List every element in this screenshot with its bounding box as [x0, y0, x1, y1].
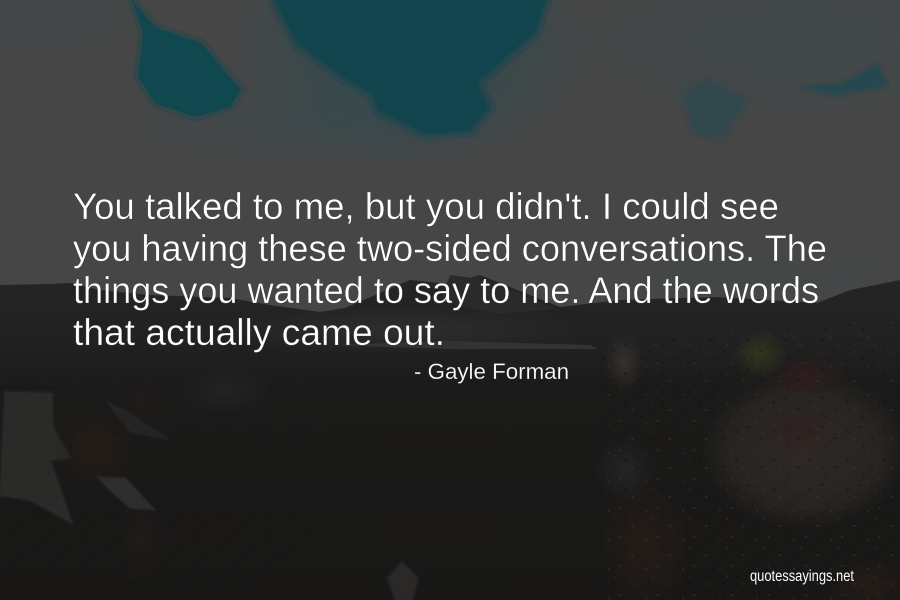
- quote text: you having these two-sided conversations. The: [73, 228, 827, 269]
- quote text: things you wanted to say to me. And the words: [73, 270, 819, 311]
- watermark: quotessayings.net: [750, 568, 855, 585]
- author attribution: - Gayle Forman: [414, 359, 569, 384]
- background: mountain ridge and mid-ground: [0, 275, 900, 600]
- background: teal sky patches: [132, 0, 886, 165]
- quote text: that actually came out.: [73, 312, 445, 353]
- background: right rock faces: [0, 315, 900, 600]
- quote text: [73, 186, 827, 353]
- quote text: You talked to me, but you didn't. I could see: [73, 186, 779, 227]
- background: left rock faces: [0, 368, 275, 585]
